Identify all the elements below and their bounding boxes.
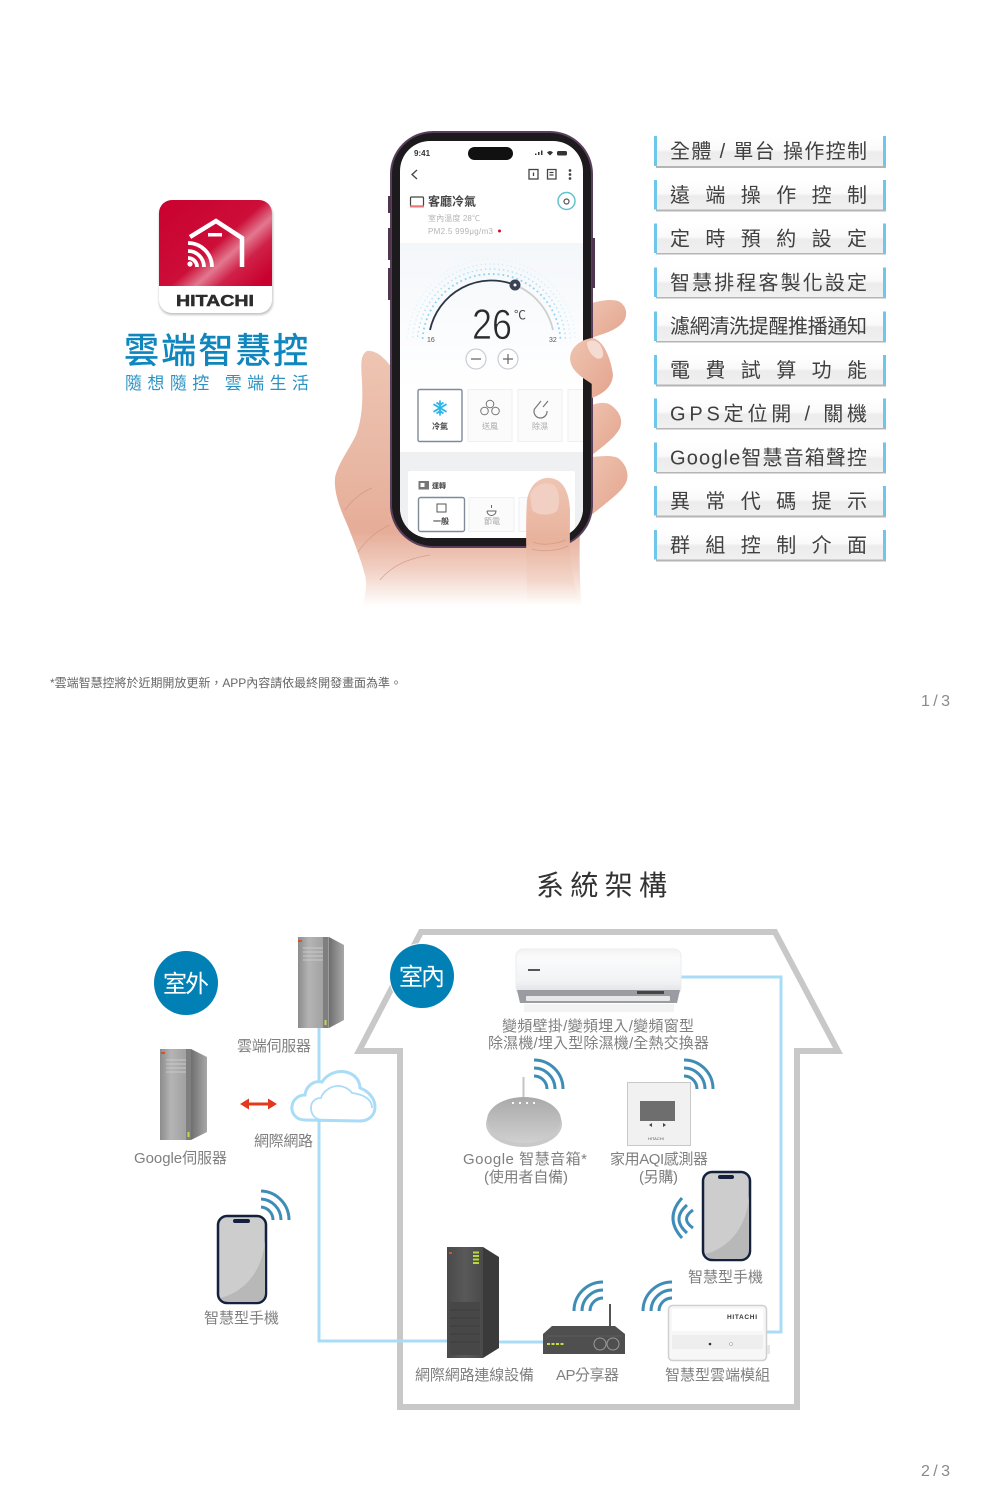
feature: electricity estimate: 電費試算功能 bbox=[670, 359, 867, 382]
temperature dial: ℃ bbox=[514, 308, 526, 322]
smart cloud module: HITACHI bbox=[727, 1314, 757, 1321]
middle finger bbox=[585, 403, 621, 455]
feature list bbox=[654, 136, 886, 562]
label: AQI sensor: 家用AQI感測器 bbox=[610, 1150, 708, 1168]
air conditioner bbox=[516, 949, 681, 1012]
label: internet: 網際網路 bbox=[254, 1133, 313, 1150]
mode buttons: 冷氣 bbox=[432, 421, 448, 431]
feature: filter reminder bbox=[654, 312, 886, 342]
feature: error code: 異常代碼提示 bbox=[670, 490, 867, 513]
hand holding phone bbox=[335, 300, 628, 605]
thumb over phone bbox=[526, 478, 582, 605]
device name: PM2.5 999μg/m3 bbox=[428, 227, 494, 236]
feature: Google voice control bbox=[654, 442, 886, 474]
feature: timer reservation bbox=[654, 224, 886, 254]
power button bbox=[558, 192, 575, 210]
page number 2: 2 / 3 bbox=[921, 1463, 950, 1480]
product title: 雲端智慧控 bbox=[124, 332, 308, 371]
system diagram title: 系統架構 bbox=[536, 870, 667, 901]
label: AQI sensor bbox=[610, 1150, 708, 1186]
mode buttons: 除濕 bbox=[532, 421, 548, 431]
label: indoor units: 除濕機/埋入型除濕機/全熱交換器 bbox=[488, 1034, 709, 1052]
badge: outdoor bbox=[154, 951, 218, 1015]
outdoor smartphone bbox=[218, 1191, 289, 1303]
feature: whole or single unit control: 全體 / 單台 操作控制 bbox=[670, 140, 867, 163]
feature: GPS on off: GPS定位開 / 關機 bbox=[670, 402, 867, 426]
feature: Google voice control: Google智慧音箱聲控 bbox=[670, 446, 867, 470]
label: AQI sensor: (另購) bbox=[639, 1169, 678, 1186]
temperature dial: 32 bbox=[549, 337, 557, 344]
product tagline: 隨想隨控 雲端生活 bbox=[125, 374, 309, 393]
feature: GPS on off bbox=[654, 398, 886, 430]
temperature dial: 16 bbox=[427, 337, 435, 344]
feature: smart schedule: 智慧排程客製化設定 bbox=[670, 272, 867, 294]
feature: electricity estimate bbox=[654, 355, 886, 386]
internet connection equipment bbox=[447, 1247, 499, 1358]
phone screen bbox=[400, 141, 598, 542]
app header icons bbox=[412, 170, 571, 179]
footnote: *雲端智慧控將於近期開放更新，APP內容請依最終開發畫面為準。 bbox=[50, 675, 402, 690]
label: Google speaker: (使用者自備) bbox=[484, 1169, 568, 1186]
status bar: 9:41 bbox=[414, 149, 431, 158]
feature: filter reminder: 濾網清洗提醒推播通知 bbox=[670, 315, 867, 338]
indoor smartphone bbox=[673, 1172, 750, 1260]
Google server bbox=[160, 1049, 207, 1140]
lower finger bbox=[585, 456, 628, 516]
device name: 客廳冷氣 bbox=[428, 194, 476, 208]
AP router bbox=[543, 1282, 625, 1354]
cloud server bbox=[298, 937, 344, 1028]
temperature dial: 26 bbox=[472, 301, 512, 349]
app logo: HITACHI bbox=[176, 293, 254, 310]
feature: smart schedule bbox=[654, 268, 886, 298]
red two-way arrow bbox=[240, 1098, 277, 1110]
mode buttons: 送風 bbox=[482, 421, 498, 431]
operation card: 節電 bbox=[484, 516, 500, 526]
feature: whole or single unit control bbox=[654, 136, 886, 168]
upper finger bbox=[585, 300, 626, 340]
Google speaker bbox=[486, 1060, 563, 1147]
smartphone bbox=[388, 131, 598, 548]
badge: indoor: 室內 bbox=[399, 964, 445, 991]
feature: group control bbox=[654, 530, 886, 562]
page number 1: 1 / 3 bbox=[921, 693, 950, 710]
label: cloud server: 雲端伺服器 bbox=[237, 1038, 311, 1055]
label: AP router: AP分享器 bbox=[556, 1367, 619, 1384]
house outline bbox=[359, 932, 838, 1407]
label: Google speaker: Google 智慧音箱* bbox=[463, 1150, 587, 1168]
operation card: 運轉 bbox=[432, 481, 446, 490]
feature: error code bbox=[654, 486, 886, 518]
palm creases bbox=[345, 488, 430, 580]
temperature dial bbox=[407, 258, 576, 342]
smart cloud module bbox=[643, 1282, 770, 1360]
network connection lines bbox=[319, 977, 781, 1342]
badge: indoor bbox=[389, 943, 455, 1009]
label: internet equipment: 網際網路連線設備 bbox=[415, 1367, 534, 1384]
label: indoor units bbox=[488, 1018, 709, 1052]
label: indoor units: 變頻壁掛/變頻埋入/變頻窗型 bbox=[502, 1018, 694, 1035]
device name bbox=[410, 194, 501, 236]
label: Google server: Google伺服器 bbox=[134, 1150, 227, 1167]
feature: timer reservation: 定時預約設定 bbox=[670, 228, 867, 250]
operation card: 一般 bbox=[433, 516, 449, 526]
AQI sensor: HITACHI bbox=[648, 1136, 664, 1141]
device name: 室內溫度 28℃ bbox=[428, 213, 480, 223]
feature: group control: 群組控制介面 bbox=[670, 534, 867, 557]
hand back bbox=[335, 351, 582, 605]
label: Google speaker bbox=[463, 1150, 587, 1186]
label: outdoor smartphone: 智慧型手機 bbox=[204, 1309, 279, 1327]
label: smart cloud module: 智慧型雲端模組 bbox=[665, 1366, 770, 1384]
feature: remote control bbox=[654, 180, 886, 212]
app logo bbox=[159, 200, 273, 315]
status bar bbox=[414, 147, 567, 160]
mode buttons bbox=[418, 390, 598, 442]
badge: outdoor: 室外 bbox=[163, 971, 209, 998]
cloud bbox=[292, 1071, 375, 1121]
feature: remote control: 遠端操作控制 bbox=[670, 184, 867, 207]
minus and plus buttons bbox=[466, 349, 518, 369]
label: indoor smartphone: 智慧型手機 bbox=[688, 1268, 763, 1286]
operation card bbox=[400, 452, 583, 542]
AQI sensor bbox=[628, 1060, 713, 1146]
index finger over phone bbox=[570, 338, 613, 398]
